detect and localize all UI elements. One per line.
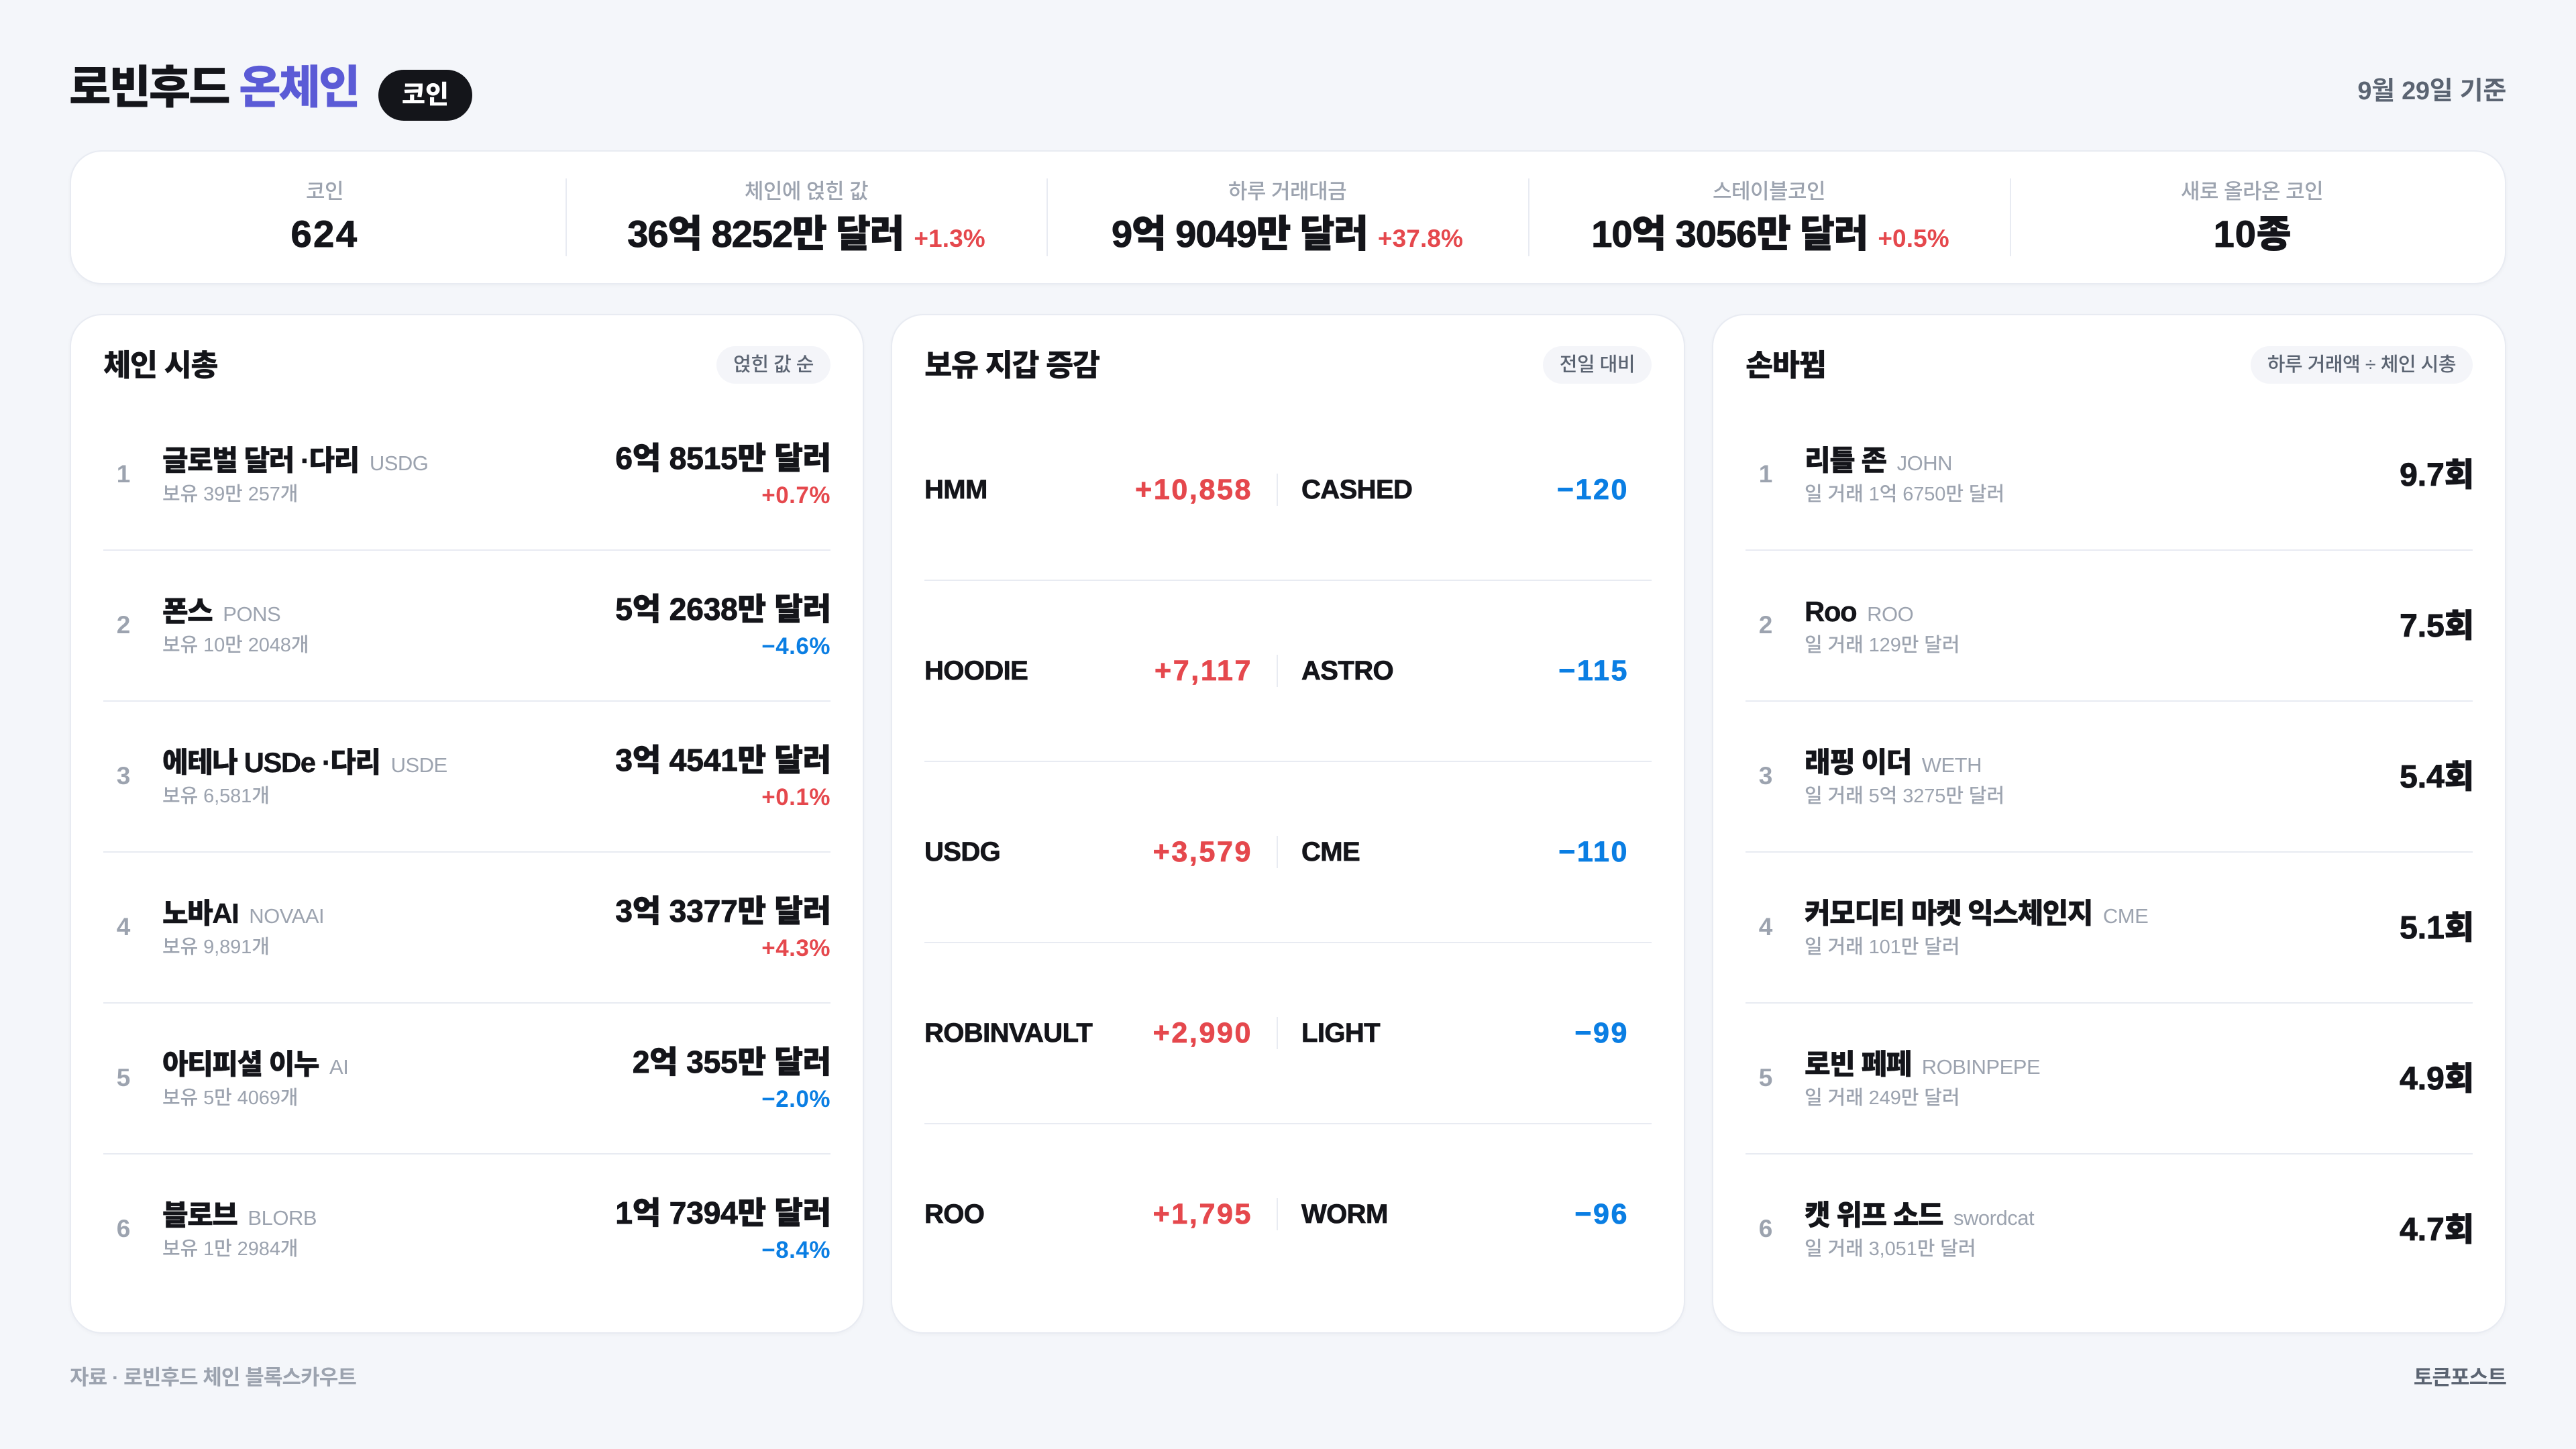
panel: chain market cap	[70, 314, 864, 1334]
title: 로빈후드 온체인	[69, 62, 358, 113]
row 1: 1	[117, 460, 130, 488]
row 1: 9.7회	[2400, 458, 2474, 493]
stat: newly listed coins: 새로 올라온 코인	[2181, 180, 2323, 203]
row 2	[1746, 550, 2473, 702]
row 1	[103, 399, 830, 551]
row 2: −115	[1558, 655, 1629, 687]
row 5: 4.9회	[2400, 1061, 2474, 1097]
row 6: 4.7회	[2400, 1212, 2474, 1248]
row 4: 4	[1759, 913, 1772, 941]
row 4: 4	[117, 913, 130, 941]
row 3: 3억 4541만 달러	[615, 743, 831, 777]
row 5: 아티피셜 이누 AI	[162, 1049, 348, 1080]
row 2	[103, 550, 830, 702]
row 3: 3	[117, 762, 130, 790]
row 2: HOODIE	[924, 656, 1028, 686]
row 2: 5억 2638만 달러	[615, 592, 831, 627]
row 1: +0.7%	[761, 482, 830, 508]
row 2: 2	[117, 611, 130, 639]
row 5: 5	[1759, 1064, 1772, 1091]
row 4	[103, 852, 830, 1004]
row 4: 5.1회	[2400, 910, 2474, 946]
row 6: 보유 1만 2984개	[162, 1238, 298, 1260]
heading: 손바뀜	[1746, 348, 1825, 382]
row 2: 폰스 PONS	[162, 596, 280, 627]
formula pill	[2251, 346, 2473, 384]
row 1	[1746, 399, 2473, 551]
row 3: 일 거래 5억 3275만 달러	[1805, 786, 2004, 807]
row 2: −4.6%	[761, 633, 830, 659]
stat: newly listed coins: 10종	[2214, 213, 2292, 255]
sort pill	[716, 346, 830, 384]
row 3: USDG	[924, 837, 1000, 867]
row 3: −110	[1558, 836, 1629, 868]
panel: turnover	[1712, 314, 2506, 1334]
row 5: WORM	[1301, 1199, 1388, 1229]
row 4: +4.3%	[761, 935, 830, 961]
row 4: 커모디티 마켓 익스체인지 CME	[1805, 898, 2148, 929]
row 3: +0.1%	[761, 784, 830, 810]
row 4: 보유 9,891개	[162, 936, 270, 958]
stat: newly listed coins	[2181, 180, 2323, 255]
stat: daily volume	[1112, 180, 1463, 255]
row 3: +3,579	[1153, 836, 1252, 868]
row 4: 노바AI NOVAAI	[162, 898, 324, 929]
row 2: 일 거래 129만 달러	[1805, 635, 1960, 656]
row 2	[924, 580, 1652, 762]
row 1: −120	[1557, 474, 1629, 506]
row 5: 보유 5만 4069개	[162, 1087, 298, 1109]
sort pill: 얹힌 값 순	[733, 354, 814, 376]
row 5: 5	[117, 1064, 130, 1091]
stat: daily volume: 9억 9049만 달러 +37.8%	[1112, 213, 1463, 255]
row 3: 래핑 이더 WETH	[1805, 747, 1982, 778]
heading: 체인 시총	[103, 348, 217, 382]
row 6: 캣 위프 소드 swordcat	[1805, 1199, 2034, 1231]
row 6	[1759, 1199, 2474, 1260]
row 1: 글로벌 달러 ·다리 USDG	[162, 445, 428, 476]
row 2: 7.5회	[2400, 608, 2474, 644]
row 3: 3	[1759, 762, 1772, 790]
row 2: ASTRO	[1301, 656, 1393, 686]
comparison pill: 전일 대비	[1560, 354, 1635, 376]
row 6: 6	[117, 1215, 130, 1242]
row 4: −99	[1574, 1017, 1629, 1049]
row 1: 보유 39만 257개	[162, 484, 298, 505]
row 1: 리틀 존 JOHN	[1805, 445, 1952, 476]
row 3: CME	[1301, 837, 1360, 867]
row 6: 블로브 BLORB	[162, 1199, 317, 1231]
row 5: ROO	[924, 1199, 984, 1229]
row 3: 에테나 USDe ·다리 USDE	[162, 747, 447, 778]
row 2: 2	[1759, 611, 1772, 639]
date: 9월 29일 기준	[2357, 77, 2506, 105]
row 6	[117, 1195, 831, 1263]
footer: publisher: 토큰포스트	[2414, 1366, 2506, 1389]
row 1	[924, 399, 1652, 581]
stat: stablecoins: 10억 3056만 달러 +0.5%	[1591, 213, 1949, 255]
row 4: 일 거래 101만 달러	[1805, 936, 1960, 958]
row 3: 보유 6,581개	[162, 786, 270, 807]
stat: locked value: 체인에 얹힌 값	[745, 180, 868, 203]
row 3	[1746, 701, 2473, 853]
row 5: −96	[1574, 1198, 1629, 1230]
row 6: 1억 7394만 달러	[615, 1195, 831, 1230]
row 5: +1,795	[1153, 1198, 1252, 1230]
row 5: 로빈 페페 ROBINPEPE	[1805, 1049, 2040, 1080]
row 6: −8.4%	[761, 1237, 830, 1263]
row 3	[103, 701, 830, 853]
stat: daily volume: 하루 거래대금	[1228, 180, 1346, 203]
row 4: +2,990	[1153, 1017, 1252, 1049]
row 1: CASHED	[1301, 475, 1412, 504]
row 3: 5.4회	[2400, 759, 2474, 795]
row 5: 일 거래 249만 달러	[1805, 1087, 1960, 1109]
stat: coins: 624	[291, 213, 358, 255]
row 5	[103, 1003, 830, 1155]
row 5: 2억 355만 달러	[633, 1044, 831, 1079]
row 6: 6	[1759, 1215, 1772, 1242]
stat: locked value	[627, 180, 985, 255]
row 1: 일 거래 1억 6750만 달러	[1805, 484, 2004, 505]
panel: holder wallet change	[891, 314, 1685, 1334]
badge: coin	[378, 70, 472, 121]
row 1: +10,858	[1135, 474, 1252, 506]
row 1: 1	[1759, 460, 1772, 488]
row 4: 3억 3377만 달러	[615, 894, 831, 928]
row 2: +7,117	[1155, 655, 1252, 687]
stat: stablecoins: 스테이블코인	[1713, 180, 1825, 203]
row 4: ROBINVAULT	[924, 1018, 1092, 1048]
row 4	[924, 943, 1652, 1124]
row 5	[924, 1198, 1629, 1230]
footer: source: 자료 · 로빈후드 체인 블록스카우트	[70, 1366, 356, 1389]
stat: coins: 코인	[306, 180, 343, 203]
comparison pill	[1543, 346, 1652, 384]
panel: summary stats	[70, 150, 2506, 284]
heading: 보유 지갑 증감	[924, 348, 1099, 382]
stat: coins	[291, 180, 358, 255]
formula pill: 하루 거래액 ÷ 체인 시총	[2267, 354, 2456, 376]
row 1: 6억 8515만 달러	[615, 441, 831, 476]
row 6: 일 거래 3,051만 달러	[1805, 1238, 1976, 1260]
row 2: 보유 10만 2048개	[162, 635, 309, 656]
row 3	[924, 761, 1652, 943]
row 5	[1746, 1003, 2473, 1155]
row 5: −2.0%	[761, 1086, 830, 1112]
row 4: LIGHT	[1301, 1018, 1380, 1048]
row 2: Roo ROO	[1805, 596, 1913, 627]
row 4	[1746, 852, 2473, 1004]
stat: locked value: 36억 8252만 달러 +1.3%	[627, 213, 985, 255]
badge: coin: 코인	[402, 81, 449, 109]
row 1: HMM	[924, 475, 987, 504]
stat: stablecoins	[1591, 180, 1949, 255]
